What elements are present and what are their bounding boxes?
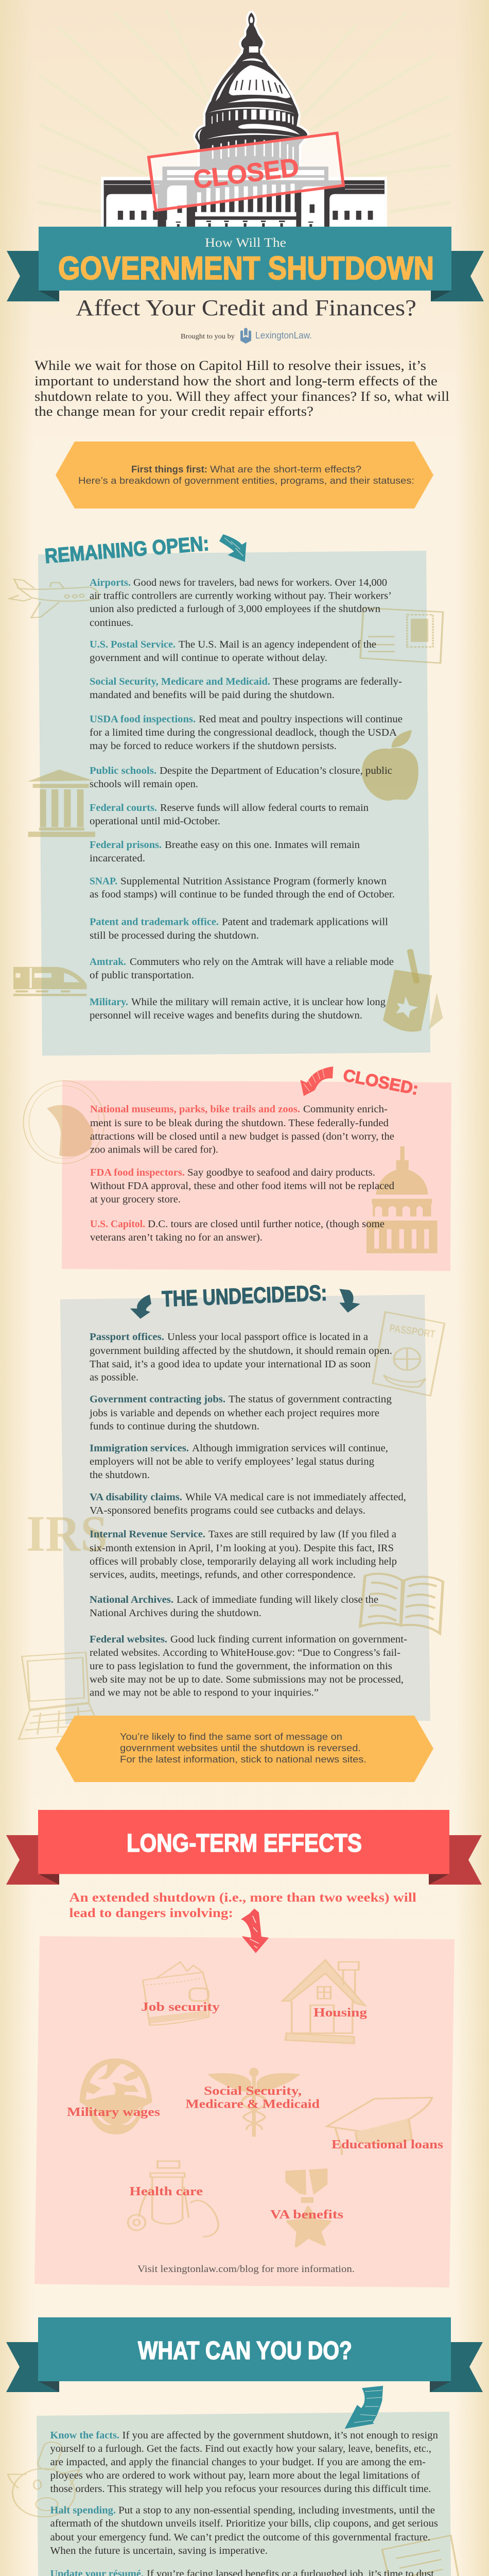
ribbon: what can you do bbox=[6, 2317, 483, 2392]
panel: long-term dangers bbox=[34, 1936, 455, 2287]
wings and central block bbox=[101, 166, 387, 227]
icon: dog tags bbox=[383, 951, 443, 1032]
item: know the facts: yourself to a furlough. Get the facts. Find out exactly how your salary, leave, benefits, etc., bbox=[50, 2444, 431, 2454]
item: know the facts: If you are affected by the government shutdown, it’s not enough to resign bbox=[123, 2430, 438, 2441]
byline with logo: Brought to you by bbox=[181, 333, 235, 341]
item: national museums: National museums, parks, bike trails and zoos. bbox=[90, 1104, 300, 1115]
text: extended shutdown intro bbox=[69, 1891, 416, 1920]
item: federal courts: operational until mid-October. bbox=[90, 816, 220, 827]
icon: train bbox=[13, 967, 86, 996]
panel: remaining open bbox=[38, 551, 430, 1056]
item: airports bbox=[90, 578, 392, 629]
text block: closed items bbox=[90, 1104, 394, 1243]
icon: wallet bbox=[143, 1962, 209, 2025]
labels: long-term dangers bbox=[67, 2001, 443, 2222]
icon: laptop bbox=[19, 1652, 102, 1739]
labels: long-term dangers: Medicare & Medicaid bbox=[185, 2098, 320, 2111]
item: amtrak bbox=[90, 957, 394, 981]
item: federal prisons: incarcerated. bbox=[90, 853, 145, 864]
item: public schools: Despite the Department of Education’s closure, public bbox=[160, 766, 392, 776]
text: extended shutdown intro: An extended shutdown (i.e., more than two weeks) will bbox=[69, 1891, 416, 1905]
item: halt spending: Halt spending. bbox=[50, 2505, 116, 2516]
item: federal courts bbox=[90, 803, 369, 827]
heading: long-term effects: LONG-TERM EFFECTS bbox=[127, 1829, 362, 1857]
item: snap bbox=[90, 876, 395, 900]
item: va claims bbox=[90, 1492, 406, 1516]
item: contracting jobs: The status of government contracting bbox=[229, 1394, 392, 1405]
item: immigration: employers will not be able to verify employees’ legal status during bbox=[90, 1456, 374, 1467]
callout: first things first: First things first: bbox=[131, 464, 207, 474]
item: passport offices: as possible. bbox=[90, 1372, 138, 1383]
text: extended shutdown intro: lead to dangers involving: bbox=[69, 1906, 233, 1920]
item: know the facts: Know the facts. bbox=[50, 2430, 119, 2441]
item: social security: Social Security, Medicare and Medicaid. bbox=[90, 676, 270, 687]
item: federal courts: Reserve funds will allow federal courts to remain bbox=[160, 803, 369, 814]
arrow: what can you do bbox=[345, 2386, 383, 2429]
item: passport offices: government building affected by the shutdown, it should remain open. bbox=[90, 1346, 392, 1357]
callout: same sort of message: government websites until the shutdown is reversed. bbox=[120, 1743, 361, 1753]
item: fda: FDA food inspectors. bbox=[90, 1167, 185, 1178]
item: archives: National Archives. bbox=[90, 1595, 173, 1605]
item: military: Military. bbox=[90, 997, 128, 1008]
panel: closed bbox=[62, 1080, 451, 1271]
item: halt spending: about your emergency fund. We can’t predict the outcome of this governmental fracture. bbox=[50, 2532, 430, 2543]
item: national museums bbox=[90, 1104, 394, 1155]
item: irs: offices will probably close, temporarily delaying all work including help bbox=[90, 1556, 397, 1567]
text: visit lexingtonlaw: Visit lexingtonlaw.com/blog for more information. bbox=[137, 2264, 355, 2275]
item: us capitol: D.C. tours are closed until further notice, (though some bbox=[148, 1219, 385, 1230]
dome white panels and ribs bbox=[198, 16, 300, 161]
item: immigration: Although immigration services will continue, bbox=[192, 1443, 388, 1454]
item: patent office bbox=[90, 917, 389, 941]
item: archives: Lack of immediate funding will likely close the bbox=[177, 1595, 378, 1605]
item: websites: and we may not be able to respond to your inquiries.” bbox=[90, 1688, 319, 1698]
item: airports: Airports. bbox=[90, 578, 131, 588]
item: amtrak: Commuters who rely on the Amtrak will have a reliable mode bbox=[130, 957, 394, 968]
item: social security bbox=[90, 676, 402, 701]
item: irs: six-month extension in April, I’m looking at you). Despite this fact, IRS bbox=[90, 1543, 394, 1554]
text block: undecided items bbox=[89, 1332, 407, 1698]
intro paragraph: the change mean for your credit repair efforts? bbox=[34, 404, 313, 419]
labels: long-term dangers: VA benefits bbox=[270, 2208, 343, 2222]
item: military: While the military will remain active, it is unclear how long bbox=[131, 997, 386, 1008]
callout: first things first bbox=[56, 442, 433, 509]
item: know the facts: those orders. This strategy will help you refocus your resources during this difficult time. bbox=[50, 2484, 431, 2495]
item: federal courts: Federal courts. bbox=[90, 803, 157, 814]
heading: remaining open: REMAINING OPEN: bbox=[44, 532, 210, 568]
icon: IRS lettering: IRS bbox=[26, 1505, 108, 1562]
capitol silhouette with white halo bbox=[195, 12, 307, 179]
icon: California park stamp bbox=[23, 1081, 104, 1163]
callout: same sort of message bbox=[56, 1716, 433, 1782]
icon: apple bbox=[362, 730, 418, 801]
arrow: closed bbox=[300, 1066, 333, 1096]
item: amtrak: Amtrak. bbox=[90, 957, 126, 968]
item: patent office: Patent and trademark office. bbox=[90, 917, 219, 927]
stamp word: closed: CLOSED bbox=[192, 152, 301, 194]
item: archives bbox=[90, 1595, 378, 1619]
item: va claims: VA-sponsored benefits programs could see cutbacks and delays. bbox=[90, 1505, 365, 1516]
byline with logo bbox=[181, 328, 312, 344]
item: social security: These programs are federally- bbox=[273, 676, 402, 687]
labels: long-term dangers: Social Security, bbox=[204, 2084, 302, 2098]
item: postal service bbox=[90, 639, 376, 664]
item: va claims: VA disability claims. bbox=[90, 1492, 182, 1503]
item: usda: for a limited time during the congressional deadlock, though the USDA bbox=[90, 727, 397, 738]
item: military: personnel will receive wages and benefits during the shutdown. bbox=[90, 1010, 362, 1021]
item: patent office: Patent and trademark applications will bbox=[222, 917, 389, 927]
item: national museums: Community enrich- bbox=[303, 1104, 388, 1115]
item: usda: may be forced to reduce workers if the shutdown persists. bbox=[90, 741, 337, 752]
labels: long-term dangers: Housing bbox=[313, 2006, 367, 2020]
callout: first things first: Here’s a breakdown of government entities, programs, and their statuses: bbox=[78, 476, 414, 486]
item: postal service: U.S. Postal Service. bbox=[90, 639, 176, 650]
item: contracting jobs bbox=[89, 1394, 392, 1432]
intro paragraph: important to understand how the short and long-term effects of the bbox=[34, 374, 438, 388]
item: airports: continues. bbox=[90, 618, 133, 629]
item: fda: Without FDA approval, these and other food items will not be replaced bbox=[90, 1181, 394, 1192]
item: immigration: the shutdown. bbox=[90, 1470, 150, 1481]
title ribbon bbox=[7, 227, 484, 301]
item: federal prisons: Breathe easy on this one. Inmates will remain bbox=[165, 840, 360, 851]
item: va claims: While VA medical care is not immediately affected, bbox=[185, 1492, 406, 1503]
icon: capitol silhouette bbox=[366, 1146, 438, 1253]
icon: caduceus bbox=[207, 2067, 301, 2137]
arrows: undecideds bbox=[130, 1289, 360, 1319]
item: irs: Taxes are still required by law (If you filed a bbox=[208, 1529, 396, 1540]
item: national museums: ment is sure to be bleak during the shutdown. These federally-funded bbox=[90, 1118, 389, 1129]
labels: long-term dangers: Job security bbox=[141, 2001, 220, 2014]
item: archives: National Archives during the shutdown. bbox=[90, 1608, 261, 1619]
item: halt spending: Put a stop to any non-essential spending, including investments, until the bbox=[118, 2505, 435, 2516]
title: government shutdown: GOVERNMENT SHUTDOWN bbox=[58, 250, 434, 286]
item: halt spending: When the future is uncertain, saving is imperative. bbox=[50, 2546, 268, 2556]
item: social security: mandated and benefits will be paid during the shutdown. bbox=[90, 690, 335, 701]
item: public schools bbox=[90, 766, 392, 790]
heading: what can you do: WHAT CAN YOU DO? bbox=[138, 2337, 352, 2365]
dome ribs bbox=[235, 79, 282, 94]
byline with logo: LexingtonLaw. bbox=[255, 330, 312, 341]
item: airports: Good news for travelers, bad news for workers. Over 14,000 bbox=[133, 578, 387, 588]
item: postal service: government and will continue to operate without delay. bbox=[90, 653, 327, 664]
item: us capitol bbox=[90, 1219, 385, 1243]
ribbon: long-term effects bbox=[6, 1810, 482, 1885]
title: subtitle: Affect Your Credit and Finances? bbox=[76, 295, 416, 320]
labels: long-term dangers: Military wages bbox=[67, 2106, 160, 2119]
arrow: long-term bbox=[241, 1908, 269, 1953]
item: know the facts: ployees who are ordered to work without pay, learn more about the legal limitations of bbox=[50, 2470, 421, 2481]
icon: Lexington Law logo bbox=[240, 328, 251, 344]
intro paragraph: While we wait for those on Capitol Hill to resolve their issues, it’s bbox=[34, 358, 426, 373]
item: passport offices: Unless your local passport office is located in a bbox=[167, 1332, 368, 1343]
item: snap: Supplemental Nutrition Assistance Program (formerly known bbox=[120, 876, 387, 887]
item: amtrak: of public transportation. bbox=[90, 970, 194, 981]
item: contracting jobs: funds to continue during the shutdown. bbox=[90, 1421, 259, 1432]
title: how will the: How Will The bbox=[205, 236, 286, 250]
icon: medal bbox=[285, 2168, 330, 2246]
item: postal service: The U.S. Mail is an agency independent of the bbox=[179, 639, 376, 650]
item: websites: Federal websites. bbox=[90, 1634, 167, 1645]
item: irs bbox=[90, 1529, 397, 1581]
closed stamp frame bbox=[149, 133, 343, 210]
icon: open book bbox=[360, 1574, 443, 1634]
arrow: remaining open bbox=[219, 534, 247, 562]
text block: remaining open items bbox=[90, 578, 403, 1021]
item: usda bbox=[90, 714, 403, 752]
sunburst rays bbox=[39, 11, 449, 212]
panel: what can you do bbox=[37, 2412, 452, 2576]
icon: passport bbox=[373, 1312, 445, 1396]
item: contracting jobs: jobs is variable and depends on whether each project requires more bbox=[89, 1408, 379, 1419]
item: websites: Good luck finding current information on government- bbox=[170, 1634, 407, 1645]
item: us capitol: U.S. Capitol. bbox=[90, 1219, 145, 1230]
callout: first things first: What are the short-term effects? bbox=[210, 464, 361, 474]
item: fda bbox=[90, 1167, 394, 1205]
item: halt spending bbox=[50, 2505, 438, 2556]
item: halt spending: aftermath of the shutdown unveils itself. Prioritize your bills, clip coupons, and get serious bbox=[50, 2518, 438, 2529]
item: usda: USDA food inspections. bbox=[90, 714, 196, 725]
item: public schools: Public schools. bbox=[90, 766, 156, 776]
icon: envelope bbox=[360, 608, 443, 663]
item: passport offices bbox=[90, 1332, 392, 1383]
icon: graduation cap bbox=[327, 2097, 432, 2155]
item: websites bbox=[90, 1634, 407, 1698]
item: websites: related websites. According to WhiteHouse.gov: “Due to Congress’s fail- bbox=[90, 1648, 400, 1658]
heading: the undecideds: THE UNDECIDEDS: bbox=[162, 1281, 327, 1312]
icon: pill jar and stethoscope bbox=[128, 2161, 218, 2236]
icon: house bbox=[282, 1960, 365, 2043]
item: federal prisons: Federal prisons. bbox=[90, 840, 162, 851]
item: passport offices: Passport offices. bbox=[90, 1332, 164, 1343]
item: snap: SNAP. bbox=[90, 876, 117, 887]
item: immigration: Immigration services. bbox=[90, 1443, 189, 1454]
heading: closed: CLOSED: bbox=[342, 1065, 420, 1098]
icon: courthouse columns bbox=[27, 770, 95, 837]
item: websites: web site may not be up to date. Some submissions may not be processed, bbox=[90, 1674, 404, 1685]
intro paragraph bbox=[34, 358, 449, 419]
item: fda: at your grocery store. bbox=[90, 1194, 181, 1205]
item: public schools: schools will remain open. bbox=[90, 779, 198, 790]
icon: army helmet bbox=[80, 2059, 152, 2134]
item: airports: union also predicted a furlough of 3,000 employees if the shutdown bbox=[90, 604, 380, 615]
item: know the facts bbox=[50, 2430, 438, 2495]
item: military bbox=[90, 997, 386, 1021]
item: airports: air traffic controllers are currently working without pay. Their workers’ bbox=[90, 590, 392, 602]
intro paragraph: shutdown relate to you. Will they affect your finances? If so, what will bbox=[34, 389, 449, 404]
item: passport offices: That said, it’s a good idea to update your international ID as soon bbox=[90, 1359, 371, 1370]
callout: same sort of message: For the latest information, stick to national news sites. bbox=[120, 1754, 366, 1765]
item: federal prisons bbox=[90, 840, 360, 864]
item: patent office: still be processed during the shutdown. bbox=[90, 930, 259, 941]
item: immigration bbox=[90, 1443, 388, 1481]
item: us capitol: veterans aren’t taking no for an answer). bbox=[90, 1232, 263, 1243]
item: snap: as food stamps) will continue to be funded through the end of October. bbox=[90, 889, 395, 900]
icon: passport: PASSPORT bbox=[389, 1323, 435, 1340]
ribbon tails bbox=[7, 251, 484, 301]
item: fda: Say goodbye to seafood and dairy products. bbox=[187, 1167, 375, 1178]
icon: airplane bbox=[9, 579, 98, 618]
item: irs: services, audits, meetings, refunds, and other correspondence. bbox=[90, 1569, 356, 1581]
labels: long-term dangers: Health care bbox=[130, 2185, 203, 2198]
item: usda: Red meat and poultry inspections will continue bbox=[199, 714, 403, 725]
icon: note sheet bbox=[382, 2535, 460, 2576]
item: contracting jobs: Government contracting jobs. bbox=[90, 1394, 225, 1405]
item: national museums: attractions will be closed until a new budget is passed (don’t worry, the bbox=[90, 1131, 394, 1142]
panel: the undecideds bbox=[60, 1295, 430, 1724]
labels: long-term dangers: Educational loans bbox=[331, 2138, 443, 2151]
callout: same sort of message: You’re likely to find the same sort of message on bbox=[120, 1732, 342, 1742]
item: irs: Internal Revenue Service. bbox=[90, 1529, 205, 1540]
icon: piggy bank bbox=[8, 2441, 80, 2517]
text block: what can you do items bbox=[50, 2430, 438, 2576]
item: national museums: zoo animals will be cared for). bbox=[90, 1145, 218, 1155]
capitol building illustration bbox=[101, 12, 387, 227]
item: websites: ure to pass legislation to fund the government, the information on this bbox=[90, 1661, 392, 1672]
item: know the facts: are impacted, and apply the financial changes to your budget. If you are among the em- bbox=[50, 2457, 426, 2468]
